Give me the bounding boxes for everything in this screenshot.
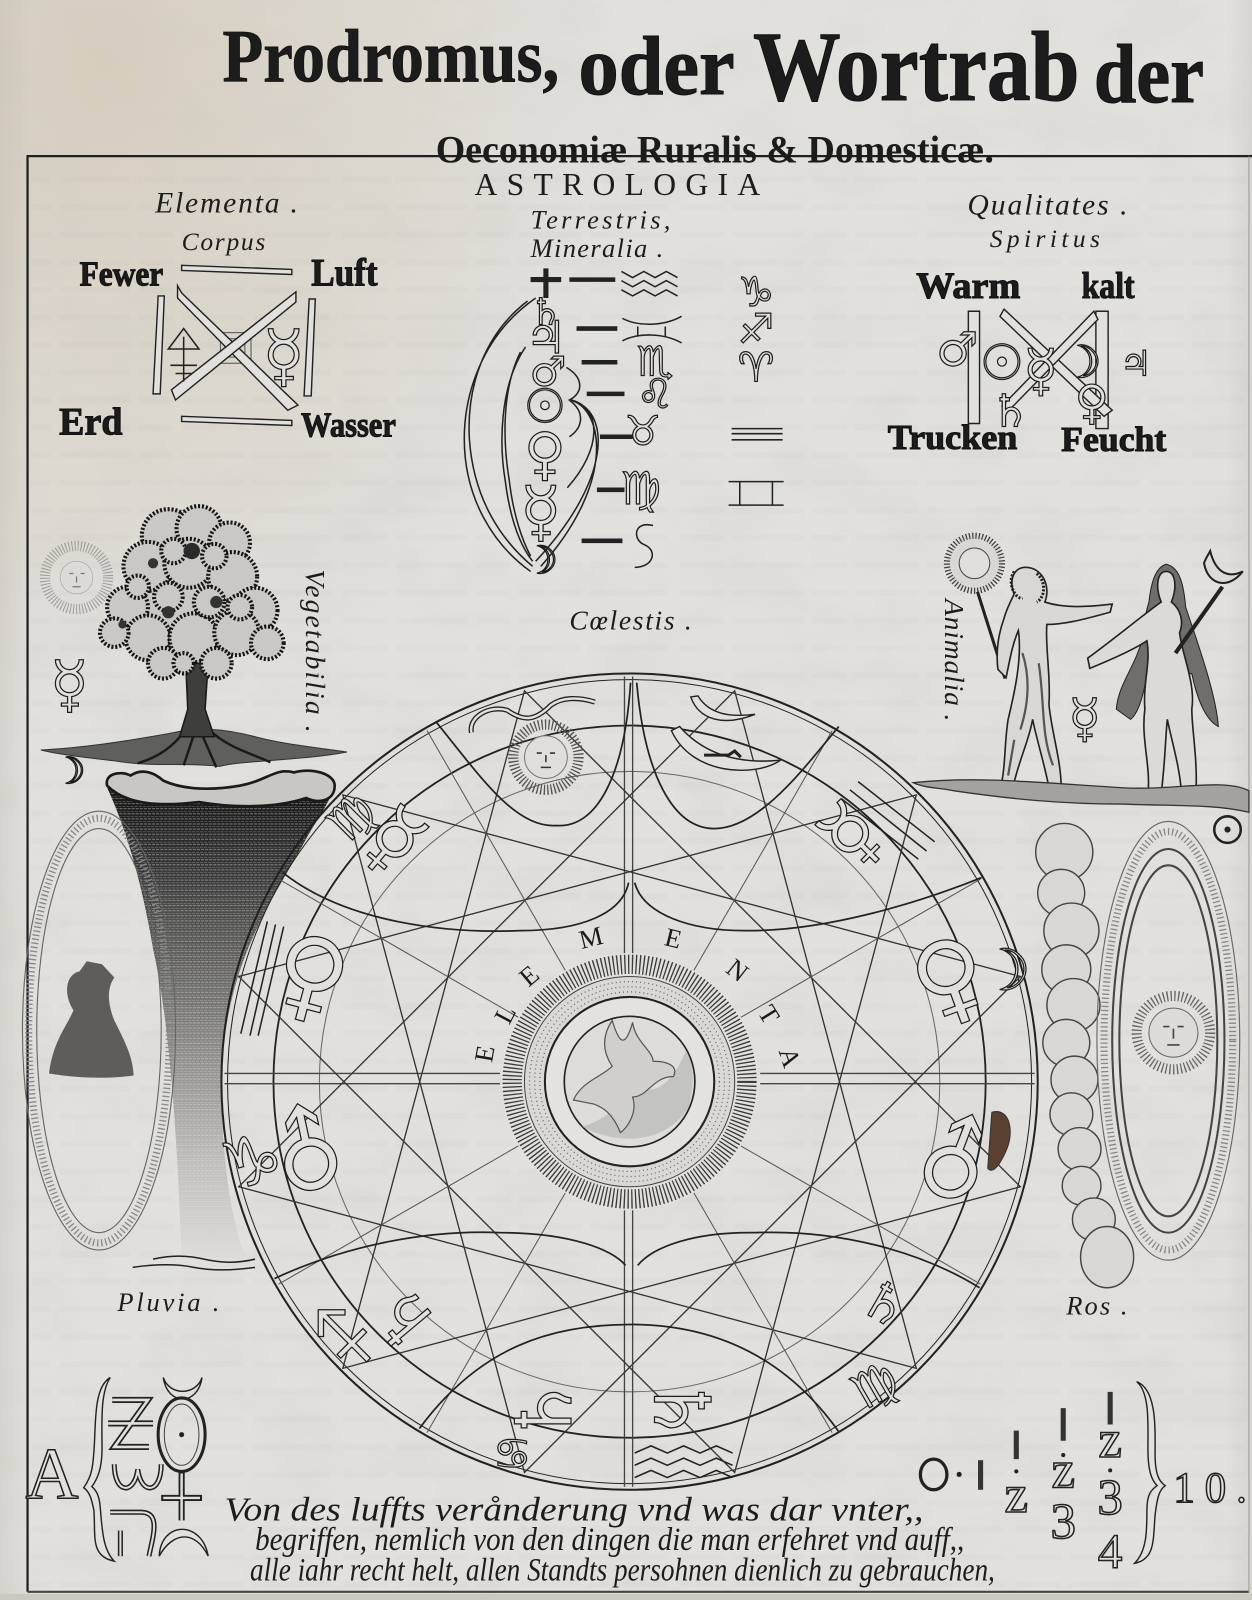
zodiac and planet symbols on the rim: ♄ (500, 1375, 590, 1445)
zodiac signs column one: ♌ (637, 370, 673, 418)
label: Elementa: Elementa . (154, 187, 298, 219)
zodiac and planet symbols on the rim: ☿ (343, 786, 445, 894)
ground under figures (913, 780, 1249, 812)
sun face (1137, 996, 1210, 1069)
column: 0.1 (920, 1459, 981, 1490)
qualitates planet symbols: ♃ (1120, 345, 1151, 385)
caption line 3: alle iahr recht helt, allen Standts persohnen dienlich zu gebrauchen, (250, 1553, 995, 1589)
planet column: ♂ (530, 348, 566, 396)
zodiac and planet symbols on the rim: ♀ (895, 910, 1004, 1045)
title (222, 11, 1204, 122)
panel: bottom-right numbers (920, 1382, 1247, 1578)
label: ELEMENTA ring: E (662, 922, 685, 955)
subtitle: Oeconomiæ Ruralis & Domesticæ. (436, 128, 994, 171)
label: Animalia: Animalia . (939, 597, 970, 721)
panel: bottom caption (224, 1491, 995, 1589)
zodiac and planet symbols on the rim: ♄ (636, 1375, 726, 1445)
left brace (84, 1378, 114, 1561)
label: Spiritus: Spiritus (990, 224, 1100, 253)
globe (564, 1016, 695, 1147)
number pyramid: z (1051, 1442, 1075, 1500)
title: Prodromus, (222, 16, 559, 99)
zodiac and planet symbols on the rim: ♐ (305, 1304, 388, 1368)
rings (221, 673, 1038, 1490)
zodiac and planet symbols on the rim: ♄ (849, 1265, 921, 1343)
curved house arcs (274, 683, 982, 1432)
label: ELEMENTA ring (468, 920, 807, 1071)
caption line 1: Von des luffts verånderung vnd was dar vnter,, (224, 1491, 923, 1528)
central elements disc (501, 953, 758, 1210)
label: kalt: kalt (1082, 265, 1135, 306)
label: ELEMENTA ring: A (773, 1044, 807, 1071)
right brace (1135, 1382, 1165, 1563)
zodiac and planet symbols on the rim: ♂ (894, 1095, 1016, 1229)
number pyramid: 4 (1098, 1523, 1122, 1578)
heading: Astrologia: ASTROLOGIA (474, 167, 760, 202)
panel: left oval with cloaked figure (22, 811, 176, 1250)
label: Luft: Luft (311, 252, 378, 295)
panel: right oval with sun (1097, 821, 1240, 1260)
icon: mercury: ☿ (262, 317, 305, 397)
clouds at funnel top (107, 771, 335, 806)
panel: Qualitates diagram (888, 189, 1167, 459)
label: ELEMENTA ring: M (576, 920, 606, 955)
qualitates planet symbols (936, 322, 1151, 438)
square of bars and crossed diagonals (153, 265, 315, 426)
planet column: ☽ (523, 538, 558, 583)
number pyramid (1005, 1392, 1123, 1578)
sun face in rim (513, 724, 579, 790)
icon: tin sign (108, 1400, 153, 1447)
panel: Elementa diagram (59, 187, 396, 445)
icon: mercury left: ☿ (50, 647, 89, 721)
zodiac signs column one (621, 271, 682, 567)
label: Fewer: Fewer (80, 255, 163, 294)
zodiac and planet symbols on the rim: ♄ (352, 1267, 456, 1370)
zodiac signs column two (729, 268, 784, 505)
funnel of rain under the tree (107, 788, 335, 1270)
house spokes (279, 731, 981, 1433)
planet column: ♃ (526, 311, 566, 364)
zodiac signs column one: ♍ (621, 462, 661, 515)
qualitates planet symbols: ♀ (1075, 375, 1109, 430)
label: ELEMENTA ring: N (721, 953, 754, 988)
woman with moon staff (1088, 551, 1243, 794)
number pyramid: z (1005, 1466, 1028, 1524)
title: der (1094, 28, 1204, 121)
zodiac and planet symbols on the rim: ♑ (213, 1115, 292, 1207)
icon: saturn-like sign (110, 1512, 154, 1556)
label: ELEMENTA ring: E (513, 959, 545, 992)
icon: small sun sign at right (1214, 816, 1241, 843)
icon: antimony triangle with cross (168, 329, 199, 382)
qualitates planet symbols: ☽ (1061, 336, 1102, 389)
silhouette figure (49, 961, 134, 1078)
trunk fill (180, 663, 214, 737)
panel: Terrestris Mineralia table (464, 205, 784, 583)
illustration: man and woman (947, 536, 1243, 794)
trunk and roots (138, 730, 270, 767)
chart: great celestial wheel (213, 673, 1038, 1490)
bars and crossed diagonals (968, 309, 1112, 429)
zodiac and planet symbols on the rim: ☽ (979, 938, 1031, 1004)
label: Coelestis: Cœlestis . (569, 605, 692, 636)
letter A: A (26, 1433, 79, 1514)
canopy (100, 506, 284, 679)
zodiac and planet symbols on the rim: ♀ (261, 909, 362, 1041)
icon: crescent left: ☽ (53, 750, 86, 793)
label: Ros: Ros . (1065, 1290, 1128, 1320)
label: ELEMENTA ring: T (752, 1000, 786, 1029)
zodiac and planet symbols on the rim: ♂ (241, 1089, 378, 1218)
label: Feucht: Feucht (1061, 420, 1167, 459)
label: Trucken: Trucken (888, 418, 1017, 457)
label: Corpus: Corpus (182, 227, 265, 256)
label: Vegetabilia: Vegetabilia . (300, 569, 331, 733)
icon: tall sun-moon-cross sign (158, 1378, 208, 1556)
zodiac signs column one: ♉ (625, 407, 661, 455)
planet column (520, 268, 566, 583)
label: Wasser: Wasser (301, 406, 396, 445)
twelve-pointed star triangles (239, 691, 1020, 1472)
label: Pluvia: Pluvia . (116, 1287, 219, 1317)
number pyramid: z (1098, 1411, 1122, 1469)
icon: mercury between figures: ☿ (1068, 688, 1101, 750)
number pyramid: 3 (1050, 1495, 1076, 1551)
panel: bottom-left A bracket with signs (26, 1378, 208, 1561)
axis double lines (224, 677, 1035, 1487)
title: oder (579, 20, 735, 113)
label: ELEMENTA ring: L (488, 1000, 522, 1028)
label: Mineralia: Mineralia . (530, 233, 663, 263)
qualitates planet symbols: ♄ (990, 385, 1030, 438)
illustration: cloud column (1036, 823, 1134, 1288)
label: Warm: Warm (916, 265, 1020, 306)
caption line 2: begriffen, nemlich von den dingen die man erfehret vnd auff,, (255, 1522, 964, 1558)
zodiac signs column two: ♑ (738, 268, 774, 316)
zodiac signs column two: ♐ (738, 305, 774, 353)
zodiac and planet symbols on the rim (213, 696, 1031, 1479)
icon: left sun face (45, 546, 108, 609)
planet column: ♀ (524, 421, 566, 487)
connecting arcs (464, 298, 598, 571)
zodiac and planet symbols on the rim: ♍ (842, 1350, 908, 1421)
title: Wortrab (753, 11, 1080, 122)
ground under tree (41, 729, 347, 766)
number 10: 10. (1173, 1465, 1247, 1512)
label: Erd: Erd (59, 401, 123, 444)
planet column: ☉ (524, 379, 566, 434)
label: Qualitates: Qualitates . (967, 189, 1128, 221)
dashes (569, 280, 633, 541)
zodiac and planet symbols on the rim: ♍ (316, 781, 387, 853)
man with sun staff (947, 536, 1112, 791)
qualitates planet symbols: ♂ (936, 322, 978, 377)
zodiac signs column one: ♏ (637, 338, 673, 386)
zodiac signs column two: ♈ (738, 344, 774, 392)
qualitates planet symbols: ☉ (980, 335, 1024, 392)
number pyramid: 3 (1097, 1470, 1123, 1526)
planet column: ♄ (529, 291, 562, 334)
label: Terrestris: Terrestris, (531, 205, 670, 235)
icon: omega-like sign (114, 1464, 161, 1488)
illustration: tree (100, 506, 284, 767)
zodiac and planet symbols on the rim: ♋ (493, 1429, 531, 1479)
label: ELEMENTA ring: E (468, 1043, 501, 1064)
planet column: ☿ (520, 472, 561, 551)
qualitates planet symbols: ☿ (1023, 338, 1058, 404)
zodiac and planet symbols on the rim: ☿ (798, 782, 904, 887)
